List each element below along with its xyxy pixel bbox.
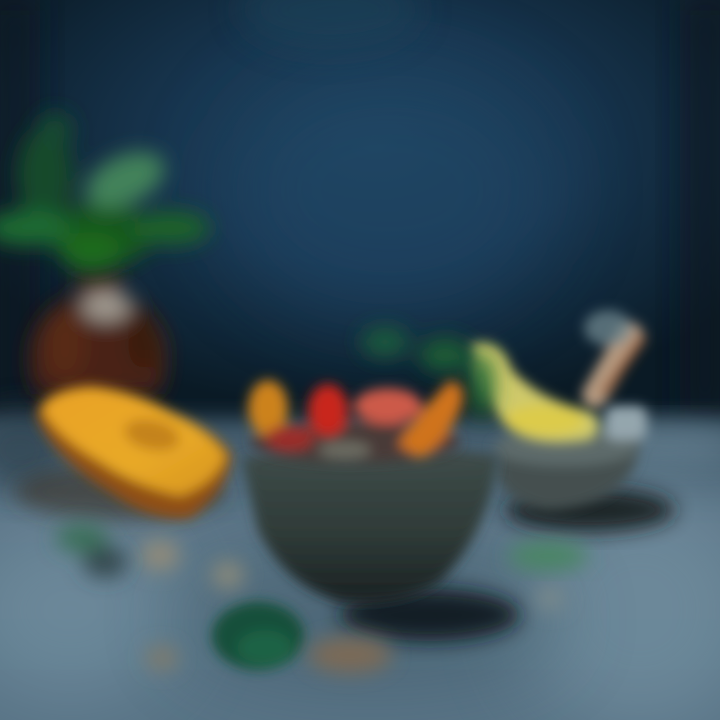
- banana: [470, 343, 599, 443]
- nuts and seeds: [140, 539, 564, 673]
- bread shadow: [15, 464, 225, 520]
- herbs above bowl: [361, 327, 494, 417]
- yellow bread slice: [36, 384, 232, 518]
- back mortar shadow: [505, 488, 675, 532]
- green leaf front: [212, 602, 304, 670]
- front bowl shadow: [340, 589, 520, 641]
- back mortar bowl: [493, 406, 647, 510]
- pestle: [584, 310, 642, 395]
- scattered herbs left: [56, 524, 127, 578]
- fruit in bowl: [248, 380, 463, 462]
- table surface: [0, 410, 720, 720]
- front mortar bowl: [242, 448, 498, 603]
- scattered herbs right: [508, 542, 588, 570]
- bottle: [30, 272, 166, 394]
- background wall: [0, 0, 720, 430]
- plant: [0, 112, 210, 272]
